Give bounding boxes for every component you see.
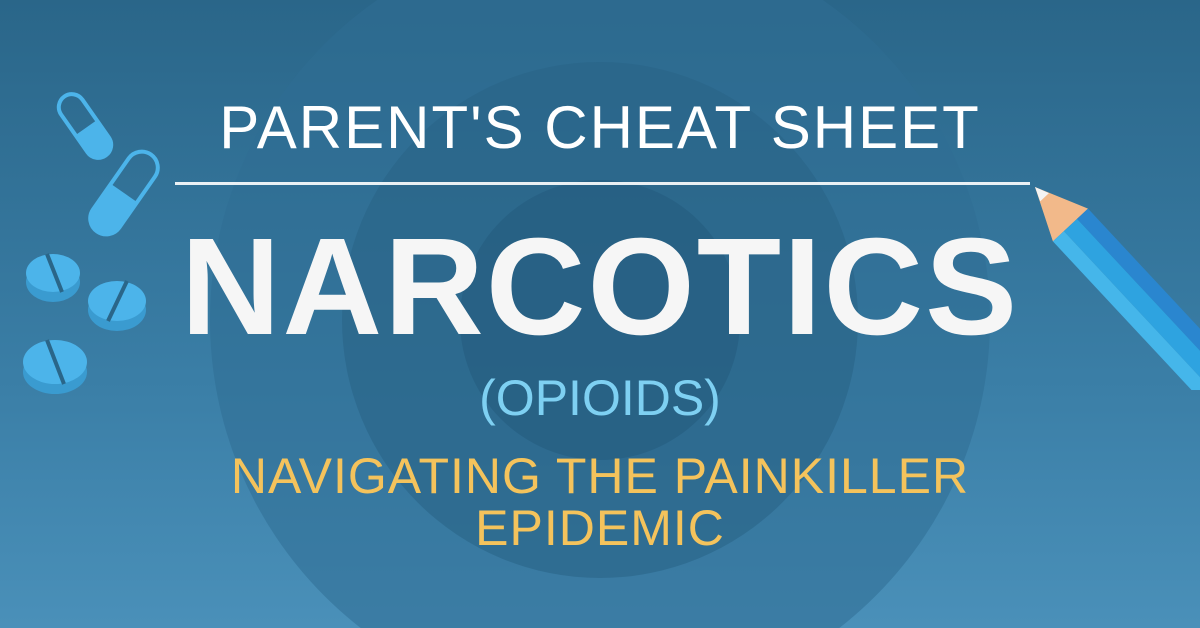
tagline	[231, 448, 969, 556]
heading: parent's cheat sheet: PARENT'S CHEAT SHEET	[219, 94, 981, 161]
title: narcotics: NARCOTICS	[181, 210, 1019, 364]
divider line	[175, 182, 1030, 185]
tagline: NAVIGATING THE PAINKILLER	[231, 448, 969, 504]
icon: pills	[23, 92, 160, 394]
subtitle: opioids: (OPIOIDS)	[479, 370, 721, 426]
icon: pencil	[1035, 187, 1200, 390]
tagline: EPIDEMIC	[475, 500, 725, 556]
